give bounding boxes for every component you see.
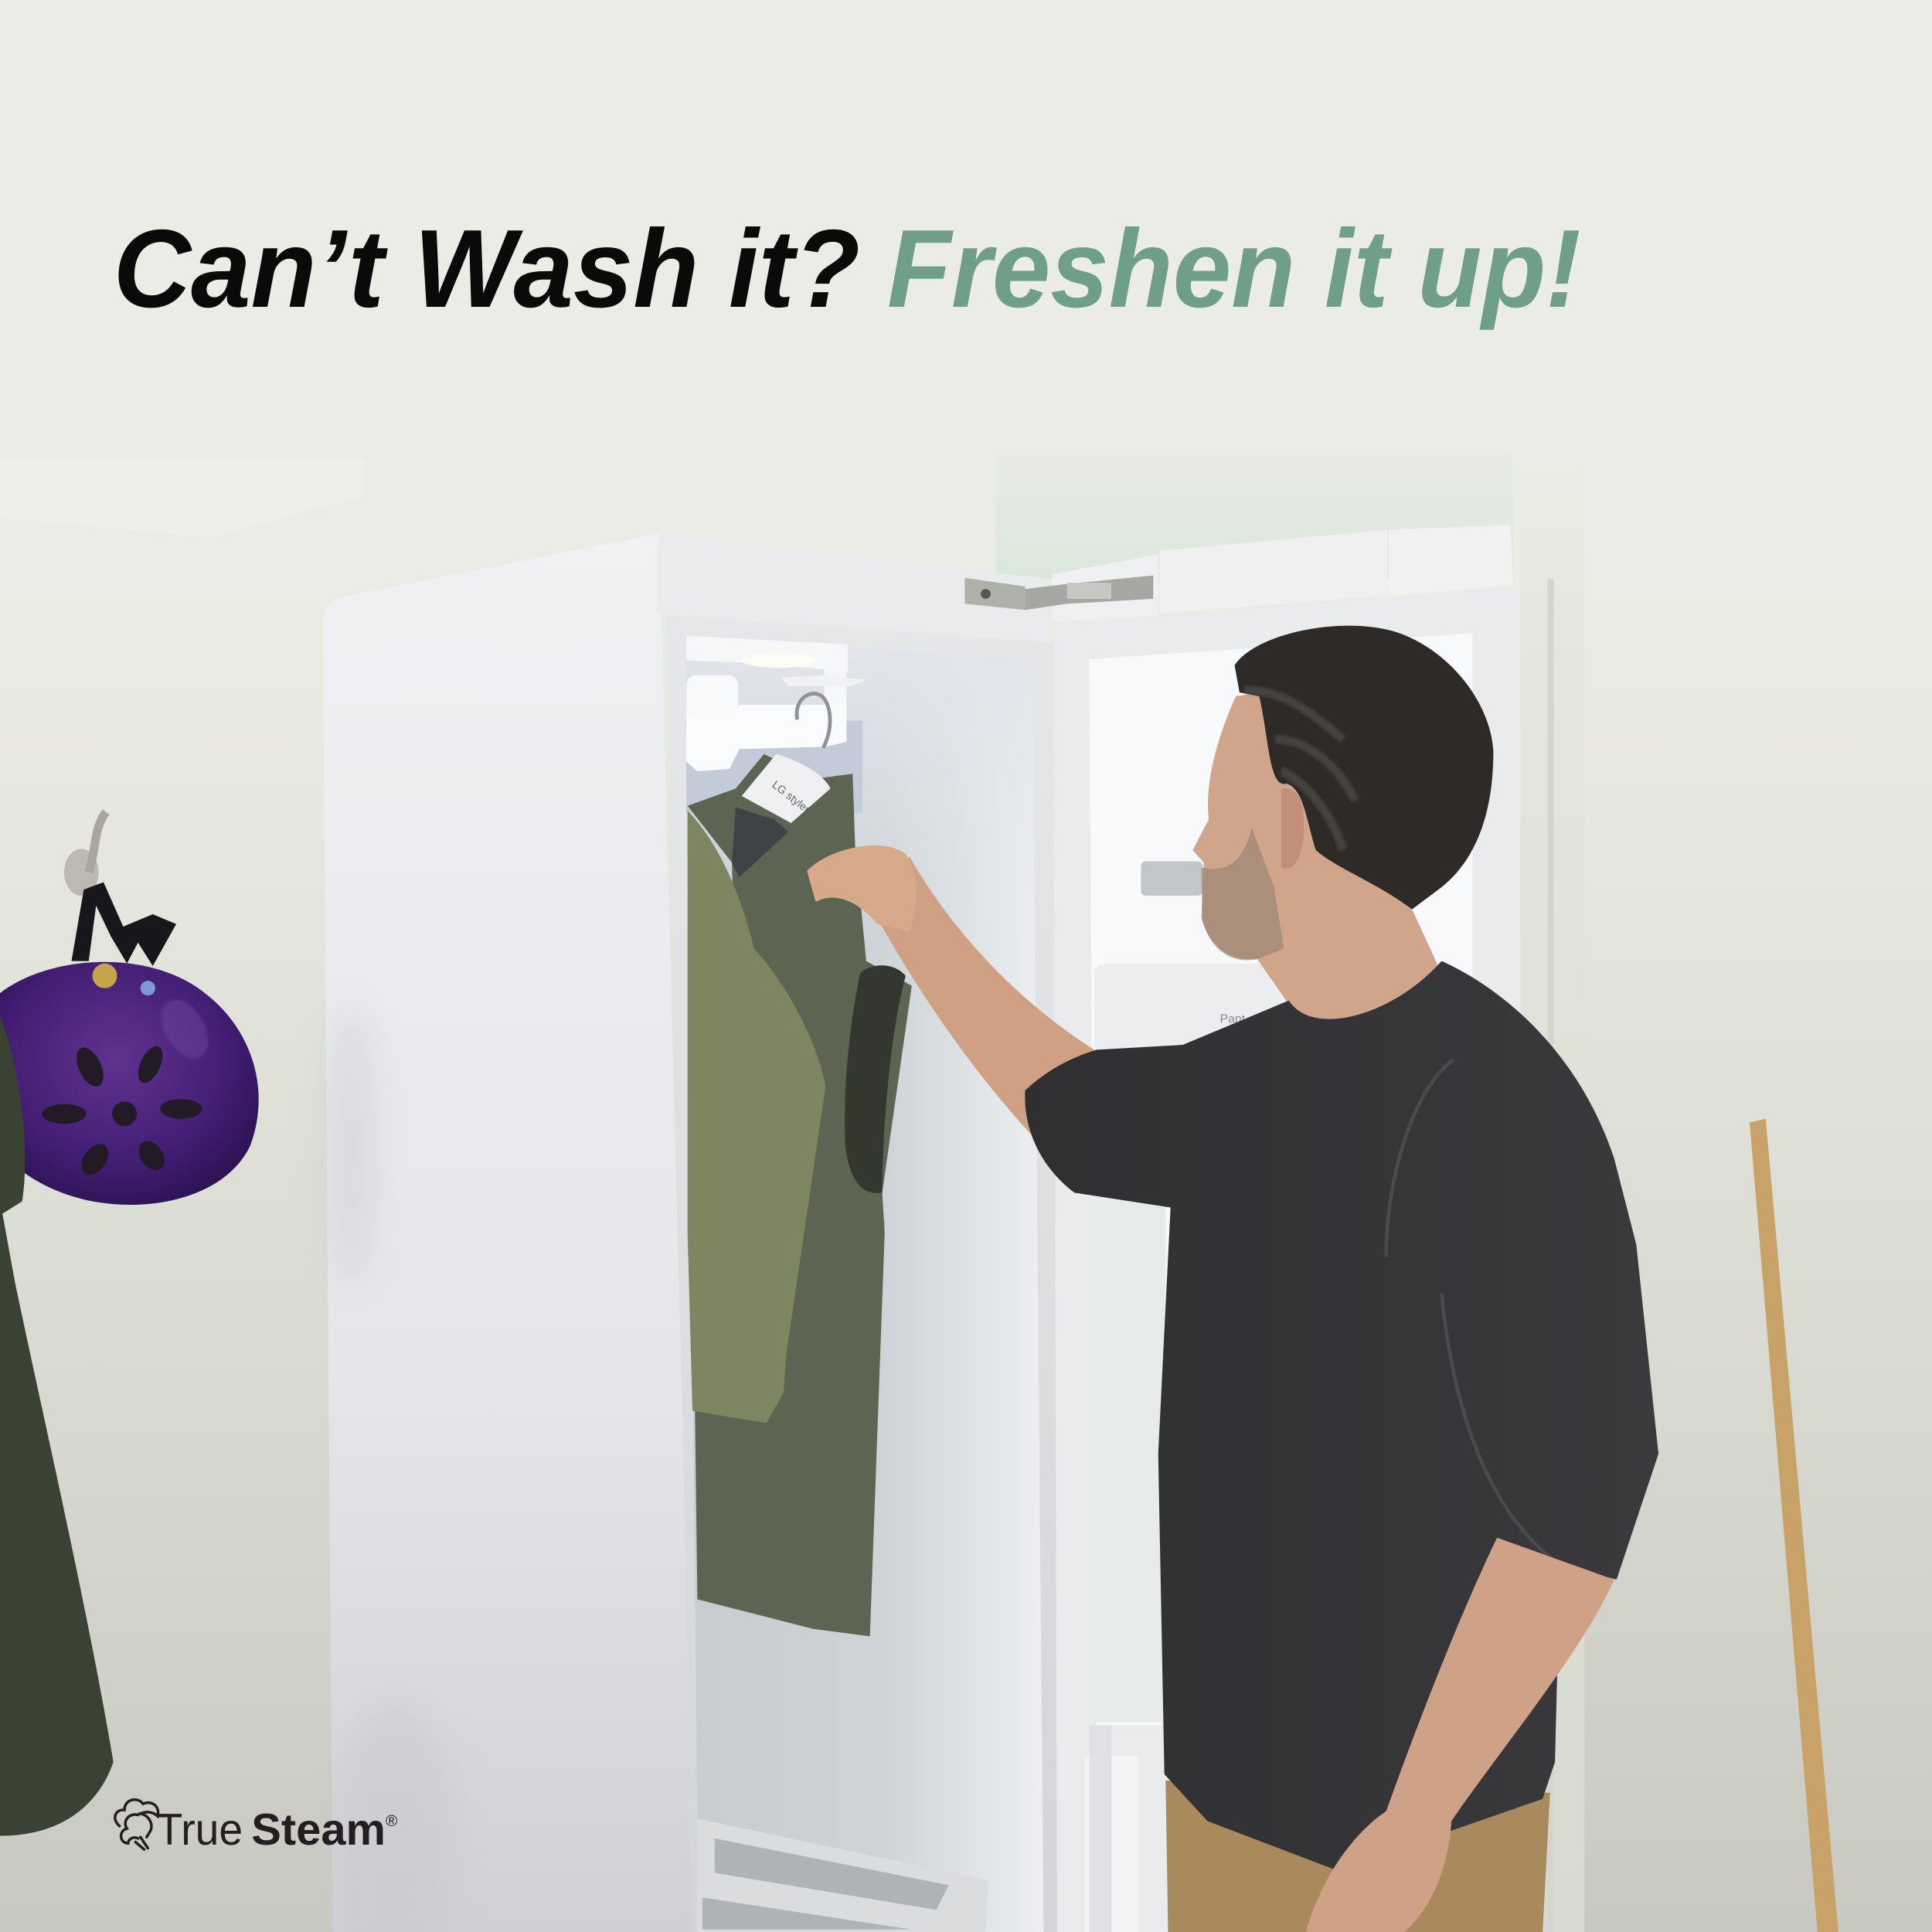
steam nozzle unit [686,636,866,813]
green vest on hanger [688,754,912,1636]
man: hair [1235,626,1493,910]
door inner panel [1089,634,1472,1725]
title [114,207,1581,331]
man: sweater torso [1025,961,1658,1870]
pantry shelf [1094,964,1306,1060]
door frame and back trim [995,450,1584,1932]
logo: True Steam [115,1800,397,1855]
door outer frame [1053,589,1520,1932]
cabinet side shadows [327,1004,456,1932]
vest dark collar lining [732,807,788,877]
title: Freshen it up! [887,207,1581,331]
hanging coat on wall [0,1016,114,1836]
man: near forearm and hand [1306,1538,1614,1932]
door handle [1141,861,1202,896]
bottom drip tray [697,1818,988,1932]
cabinet interior [685,637,1043,1932]
olive jacket [688,811,825,1423]
icon: metal hinge [964,576,1153,610]
logo: True Steam: Steam [251,1805,386,1855]
pantry shelf: Pant [1219,1012,1246,1026]
vest dark armhole [845,965,906,1193]
logo: True Steam: ® [386,1812,397,1830]
man: sweater sleeve seam [1386,1060,1560,1565]
icon: wall hook [64,812,106,896]
door lower column [1084,1060,1165,1932]
man: extended forearm and hand [807,845,1094,1136]
icon: steam cloud [115,1800,158,1849]
cabinet front frame [667,615,1062,1932]
hanger: LG styler [770,779,812,816]
cabinet top front panel [657,535,1049,642]
icon: purple bike helmet [0,962,259,1205]
cabinet side panel [323,533,696,1932]
wall shelf [0,458,365,537]
title: Can’t Wash it? [114,207,860,331]
hanger [742,754,831,823]
man: trousers [1165,1781,1550,1932]
logo: True Steam: True [156,1805,243,1855]
door top panels [1053,525,1513,622]
broom handle [1750,1119,1838,1932]
helmet straps [71,883,176,966]
man: neck and head [1192,690,1441,1060]
